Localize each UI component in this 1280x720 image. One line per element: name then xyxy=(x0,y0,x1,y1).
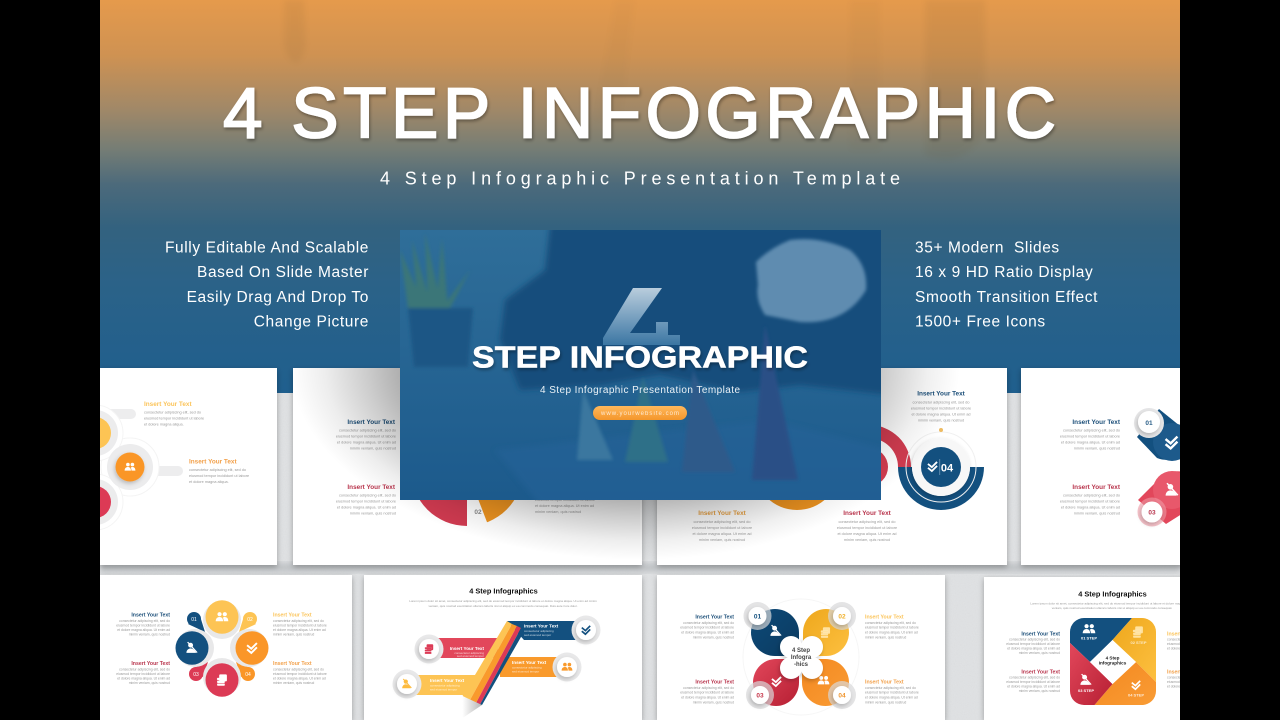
feature list right xyxy=(915,240,1098,330)
text block: red step: consectetur adipiscing elit, sed do xyxy=(838,520,896,524)
text blocks: eiusmod tempor xyxy=(1167,642,1192,646)
text blocks: eiusmod tempor incididunt ut labore xyxy=(116,672,170,676)
text block: red step: et dolore magna aliqua. Ut enim ad xyxy=(337,506,396,510)
center label: 4 Step xyxy=(1106,656,1120,660)
bar labels: Insert Your Text xyxy=(512,660,547,665)
text blocks: et dolore magna xyxy=(1167,646,1192,650)
feature list right: 35+ Modern Slides xyxy=(915,240,1060,256)
text blocks: minim veniam, quis nostrud xyxy=(273,681,314,685)
text blocks: Insert Your Text xyxy=(1167,670,1206,676)
text block: red step xyxy=(1060,484,1121,516)
text blocks: Insert Your Text xyxy=(131,612,170,618)
center clover: -hics xyxy=(794,662,809,668)
text block: orange step: et dolore magna aliqua. Ut enim ad xyxy=(692,532,752,536)
navy diamond: 01 xyxy=(1145,420,1153,427)
pie chart: 02 xyxy=(474,509,482,516)
text blocks: Insert Your Text xyxy=(695,614,734,620)
subtitle: 4 Step Infographic Presentation Template xyxy=(380,168,900,188)
number badges: 02 xyxy=(838,614,846,620)
center clover: 4 Step xyxy=(792,648,810,654)
bar labels: Insert Your Text xyxy=(450,646,484,651)
yellow bar xyxy=(408,675,482,695)
step circle yellow xyxy=(100,418,111,448)
text block: navy step xyxy=(911,390,971,422)
red circle xyxy=(206,663,238,697)
small number badges: 04 xyxy=(245,672,251,678)
hero title: STEP INFOGRAPHIC xyxy=(472,340,808,374)
segment labels: 02 STEP xyxy=(1130,640,1147,645)
pencil stripes xyxy=(462,621,525,705)
text block: red step xyxy=(336,484,396,516)
panel: slide 2 pie xyxy=(293,368,642,565)
text block: red step: et dolore magna aliqua. Ut enim ad xyxy=(1061,506,1120,510)
orange arc xyxy=(770,500,824,510)
step circle orange xyxy=(116,452,144,482)
text block: navy step xyxy=(336,419,396,450)
text blocks: consectetur adipiscing elit, sed do xyxy=(683,686,734,690)
yellow circle xyxy=(206,600,238,634)
background: orange to blue gradient xyxy=(100,0,1180,393)
segment labels: 03 STEP xyxy=(1078,688,1094,693)
text blocks: minim veniam, quis nostrud xyxy=(1019,689,1060,693)
feature list right: Smooth Transition Effect xyxy=(915,289,1098,306)
text blocks: eiusmod tempor incididunt ut labore xyxy=(1006,642,1060,646)
text block: orange step: Insert Your Text xyxy=(698,510,747,517)
red bar xyxy=(432,638,498,658)
text blocks: et dolore magna aliqua. Ut enim ad xyxy=(865,696,918,700)
text blocks: consectetur adipiscing elit, sed do xyxy=(119,668,170,672)
bar labels: consectetur adipiscing xyxy=(524,629,554,633)
text block: red step: eiusmod tempor incididunt ut labore xyxy=(837,526,897,530)
text blocks: eiusmod tempor incididunt ut labore xyxy=(116,624,170,628)
red diamond: 03 xyxy=(1148,510,1156,516)
center clover: Infogra xyxy=(791,655,812,661)
text blocks: consectetur adipiscing elit, sed do xyxy=(273,668,324,672)
pencil tip xyxy=(462,696,482,718)
text blocks: eiusmod tempor incididunt ut labore xyxy=(273,672,327,676)
red diamond xyxy=(1138,471,1180,526)
text block: navy step: consectetur adipiscing elit, sed do xyxy=(339,428,396,432)
text block: yellow step: consectetur adipiscing elit, sed do xyxy=(144,410,201,414)
petal red xyxy=(753,659,799,706)
badge: check xyxy=(572,616,600,644)
petal gold xyxy=(803,609,849,656)
center clover xyxy=(780,636,823,679)
text block: red step: minim veniam, quis nostrud xyxy=(1074,512,1120,516)
hero subtitle: 4 Step Infographic Presentation Template xyxy=(540,385,740,396)
panel: slide 1 circular steps xyxy=(100,368,280,570)
text blocks: et dolore magna aliqua. Ut enim ad xyxy=(117,676,170,680)
text block: yellow step: et dolore magna aliqua. xyxy=(144,422,184,426)
text blocks: eiusmod tempor incididunt ut labore xyxy=(273,624,327,628)
text blocks: eiusmod tempor incididunt ut labore xyxy=(1006,680,1060,684)
navy bar xyxy=(507,621,582,640)
petal orange xyxy=(802,659,849,706)
bar labels xyxy=(430,624,559,692)
text blocks: et dolore magna xyxy=(1167,684,1192,688)
panel: slide 6 pencil xyxy=(364,575,642,720)
main title: 4 STEP INFOGRAPHIC xyxy=(223,74,1056,154)
text blocks: eiusmod tempor incididunt ut labore xyxy=(865,626,919,630)
text block: right step: et dolore magna aliqua. Ut enim ad xyxy=(535,504,594,508)
text block: navy step xyxy=(1060,419,1121,450)
text blocks: eiusmod tempor incididunt ut labore xyxy=(865,690,919,694)
halo circles xyxy=(100,405,160,530)
text block: orange step: minim veniam, quis nostrud xyxy=(699,538,745,542)
feature list right: 1500+ Free Icons xyxy=(915,314,1046,330)
number badges: 04 xyxy=(838,692,846,700)
number badges: 01 xyxy=(754,614,761,620)
number badges: 03 xyxy=(756,692,764,700)
text blocks: consectetur adipiscing elit xyxy=(1167,676,1206,680)
text block: red step: eiusmod tempor incididunt ut labore xyxy=(1060,500,1120,504)
text blocks: eiusmod tempor xyxy=(1167,680,1192,684)
text block: navy step: et dolore magna aliqua. Ut enim ad xyxy=(337,440,396,444)
text blocks: Insert Your Text xyxy=(1167,632,1206,638)
text block: orange step: eiusmod tempor incididunt ut labore xyxy=(189,474,249,478)
badge: people xyxy=(552,652,582,682)
text blocks: minim veniam, quis nostrud xyxy=(693,700,734,704)
segment labels: 04 STEP xyxy=(1128,692,1144,698)
text blocks: eiusmod tempor incididunt ut labore xyxy=(680,690,734,694)
navy half ring xyxy=(898,467,984,510)
text block: orange step: consectetur adipiscing elit, sed do xyxy=(189,468,246,472)
text blocks xyxy=(680,614,919,704)
text block: navy step: minim veniam, quis nostrud xyxy=(1074,446,1120,450)
step 04 badge xyxy=(912,438,970,496)
text block: red step: consectetur adipiscing elit, sed do xyxy=(1063,494,1120,498)
text block: yellow step: Insert Your Text xyxy=(144,401,192,408)
bar labels: consectetur adipiscing xyxy=(454,651,484,655)
pie chart xyxy=(420,500,514,526)
number badges xyxy=(744,602,856,709)
text blocks: consectetur adipiscing elit, sed do xyxy=(865,686,916,690)
feature list left: Fully Editable And Scalable xyxy=(165,240,369,256)
small number badges: 03 xyxy=(193,672,199,678)
navy circle xyxy=(176,631,208,665)
text blocks: consectetur adipiscing elit, sed do xyxy=(273,619,324,623)
text blocks: Insert Your Text xyxy=(1021,632,1060,638)
navy diamond xyxy=(1134,408,1180,461)
text blocks: Insert Your Text xyxy=(273,612,312,618)
text block: navy step: minim veniam, quis nostrud xyxy=(918,418,964,422)
bar labels: sed eiusmod tempor xyxy=(457,654,484,658)
grey halos xyxy=(180,604,264,692)
segment icons xyxy=(1080,624,1143,689)
feature list right: 16 x 9 HD Ratio Display xyxy=(915,264,1093,281)
slide intro text: veniam, quis nostrud exercitation ullamco laboris nisi ut aliquip ex ea commodo consequat. xyxy=(1052,606,1172,610)
text blocks: minim veniam, quis nostrud xyxy=(1019,651,1060,655)
panel: center hero slide xyxy=(400,225,890,505)
text blocks: et dolore magna aliqua. Ut enim ad xyxy=(117,628,170,632)
photo: hand xyxy=(756,239,866,322)
badge: hand xyxy=(392,670,422,698)
bar labels: sed eiusmod tempor xyxy=(512,670,539,674)
bar labels: consectetur adipiscing xyxy=(430,684,460,688)
text block: red step: eiusmod tempor incididunt ut labore xyxy=(336,500,396,504)
photo: businessman suit xyxy=(500,225,890,395)
slide heading: 4 Step Infographics xyxy=(469,586,538,596)
segment labels xyxy=(1078,636,1147,698)
text blocks: minim veniam, quis nostrud xyxy=(129,681,170,685)
red arc xyxy=(881,426,911,482)
big faded numeral 4 xyxy=(603,288,680,345)
photo: paper and desk xyxy=(495,420,890,505)
text blocks: consectetur adipiscing elit, sed do xyxy=(119,619,170,623)
text blocks xyxy=(116,612,327,685)
text block: navy step: Insert Your Text xyxy=(1072,419,1121,426)
orange circle xyxy=(236,631,268,665)
text block: red step xyxy=(837,510,897,542)
slide intro text: Lorem ipsum dolor sit amet, consectetur adipiscing elit, sed do eiusmod tempor incididunt ut labore et dolore magna aliqua. Ut enim ad minim xyxy=(409,599,597,603)
text block: navy step: consectetur adipiscing elit, sed do xyxy=(912,400,970,404)
text blocks: Insert Your Text xyxy=(273,661,312,667)
text blocks: consectetur adipiscing elit xyxy=(1167,638,1206,642)
panel: slide 3 wave rings xyxy=(657,368,1007,565)
text blocks: et dolore magna aliqua. Ut enim ad xyxy=(273,628,326,632)
text blocks: consectetur adipiscing elit, sed do xyxy=(865,621,916,625)
text blocks: Insert Your Text xyxy=(1021,670,1060,676)
step circle red xyxy=(100,486,111,518)
photo: pyramids xyxy=(577,325,798,480)
text block: navy step: eiusmod tempor incididunt ut labore xyxy=(1060,434,1120,438)
small number badges: 02 xyxy=(247,617,253,623)
text blocks: et dolore magna aliqua. Ut enim ad xyxy=(1007,684,1060,688)
text block: red step: Insert Your Text xyxy=(347,484,396,491)
text blocks: et dolore magna aliqua. Ut enim ad xyxy=(273,676,326,680)
website button xyxy=(593,406,687,420)
text blocks: et dolore magna aliqua. Ut enim ad xyxy=(681,696,734,700)
text block: navy step: Insert Your Text xyxy=(917,390,966,398)
square segments xyxy=(1070,618,1156,705)
text block: right step: minim veniam, quis nostrud xyxy=(535,510,581,514)
panel: slide 8 rounded square xyxy=(984,577,1206,720)
text blocks: minim veniam, quis nostrud xyxy=(693,636,734,640)
segment labels: 01 STEP xyxy=(1081,636,1097,640)
photo: plant xyxy=(400,233,473,367)
text blocks: consectetur adipiscing elit, sed do xyxy=(1009,676,1060,680)
text blocks: et dolore magna aliqua. Ut enim ad xyxy=(681,630,734,634)
feature list left: Based On Slide Master xyxy=(197,264,369,281)
step 04 badge: 04 xyxy=(941,462,954,474)
slide heading: 4 Step Infographics xyxy=(1078,590,1147,598)
bar labels: Insert Your Text xyxy=(430,678,465,683)
feature list left: Change Picture xyxy=(254,314,369,330)
text block: red step: Insert Your Text xyxy=(1072,484,1121,491)
orange bar xyxy=(500,657,564,677)
text block: red step: minim veniam, quis nostrud xyxy=(844,538,890,542)
bar labels: Insert Your Text xyxy=(524,624,559,628)
text block: orange step: et dolore magna aliqua. xyxy=(189,480,229,484)
text block: orange step: eiusmod tempor incididunt ut labore xyxy=(692,526,752,530)
text blocks: Insert Your Text xyxy=(865,680,904,686)
hero slide soft shadow xyxy=(293,368,1007,565)
bar labels: consectetur adipiscing xyxy=(512,666,542,670)
text block: navy step: consectetur adipiscing elit, sed do xyxy=(1063,428,1120,432)
text blocks: minim veniam, quis nostrud xyxy=(865,636,906,640)
text block: right step: eiusmod tempor incididunt ut labore xyxy=(535,498,595,502)
petal navy xyxy=(751,609,799,656)
text blocks: consectetur adipiscing elit, sed do xyxy=(1009,638,1060,642)
outline ring and dot xyxy=(906,428,976,502)
photo layers clipped to the slide xyxy=(400,225,890,505)
text block: yellow step: eiusmod tempor incididunt ut labore xyxy=(144,416,204,420)
badge: stack xyxy=(414,634,444,664)
text blocks: Insert Your Text xyxy=(131,661,170,667)
text blocks: et dolore magna aliqua. Ut enim ad xyxy=(865,630,918,634)
text block: red step: minim veniam, quis nostrud xyxy=(350,512,396,516)
text block: right step: consectetur adipiscing elit, sed do xyxy=(535,492,592,496)
text blocks: minim veniam, quis nostrud xyxy=(865,700,906,704)
text block: navy step: eiusmod tempor incididunt ut labore xyxy=(336,434,396,438)
petal icons xyxy=(770,625,830,686)
panel: slide 5 flower circles xyxy=(100,575,352,720)
text blocks: Insert Your Text xyxy=(865,614,904,620)
text block: red step: et dolore magna aliqua. Ut enim ad xyxy=(837,532,897,536)
bar labels: sed eiusmod tempor xyxy=(430,688,457,692)
text block: yellow step xyxy=(144,401,204,426)
text block: orange step xyxy=(189,458,249,484)
text blocks: Insert Your Text xyxy=(695,680,734,686)
small number badges xyxy=(187,612,257,681)
small number badges: 01 xyxy=(191,617,197,623)
slide intro text: veniam, quis nostrud exercitation ullamco laboris nisi ut aliquip ex ea commodo consequat. Duis aute irure dolor. xyxy=(428,604,578,608)
text block: navy step: eiusmod tempor incididunt ut labore xyxy=(911,406,971,410)
text block: navy step: et dolore magna aliqua. Ut enim ad xyxy=(911,412,971,416)
text block: navy step: Insert Your Text xyxy=(347,419,396,426)
text block: navy step: et dolore magna aliqua. Ut enim ad xyxy=(1061,440,1120,444)
background: textured lower band xyxy=(100,393,1180,720)
text blocks xyxy=(1006,632,1206,693)
text blocks: et dolore magna aliqua. Ut enim ad xyxy=(1007,646,1060,650)
panel: slide 4 diamonds xyxy=(1021,368,1191,565)
text blocks: minim veniam, quis nostrud xyxy=(273,632,314,636)
text block: navy step: minim veniam, quis nostrud xyxy=(350,446,396,450)
text block: orange step: Insert Your Text xyxy=(189,458,237,466)
text block: red step: Insert Your Text xyxy=(843,510,892,517)
website button: www.yourwebsite.com xyxy=(600,411,679,417)
text blocks: eiusmod tempor incididunt ut labore xyxy=(680,626,734,630)
feature list left xyxy=(165,240,369,330)
text block: red step: consectetur adipiscing elit, sed do xyxy=(339,494,396,498)
text block: orange step xyxy=(692,510,752,542)
background: faded photo shapes xyxy=(287,3,982,64)
panel: slide 7 clover petals xyxy=(657,575,945,720)
bar labels: sed eiusmod tempor xyxy=(524,633,551,637)
feature list left: Easily Drag And Drop To xyxy=(187,289,369,306)
text block: orange step: consectetur adipiscing elit, sed do xyxy=(694,520,750,524)
text blocks: consectetur adipiscing elit, sed do xyxy=(683,621,734,625)
slide intro text: Lorem ipsum dolor sit amet, consectetur adipiscing elit, sed do eiusmod tempor incididunt ut labore et dolore magna aliqua. xyxy=(1030,602,1194,606)
text blocks: minim veniam, quis nostrud xyxy=(129,632,170,636)
connector bars xyxy=(110,409,183,476)
center label: Infographics xyxy=(1099,660,1127,666)
outer thin ring xyxy=(743,599,859,715)
